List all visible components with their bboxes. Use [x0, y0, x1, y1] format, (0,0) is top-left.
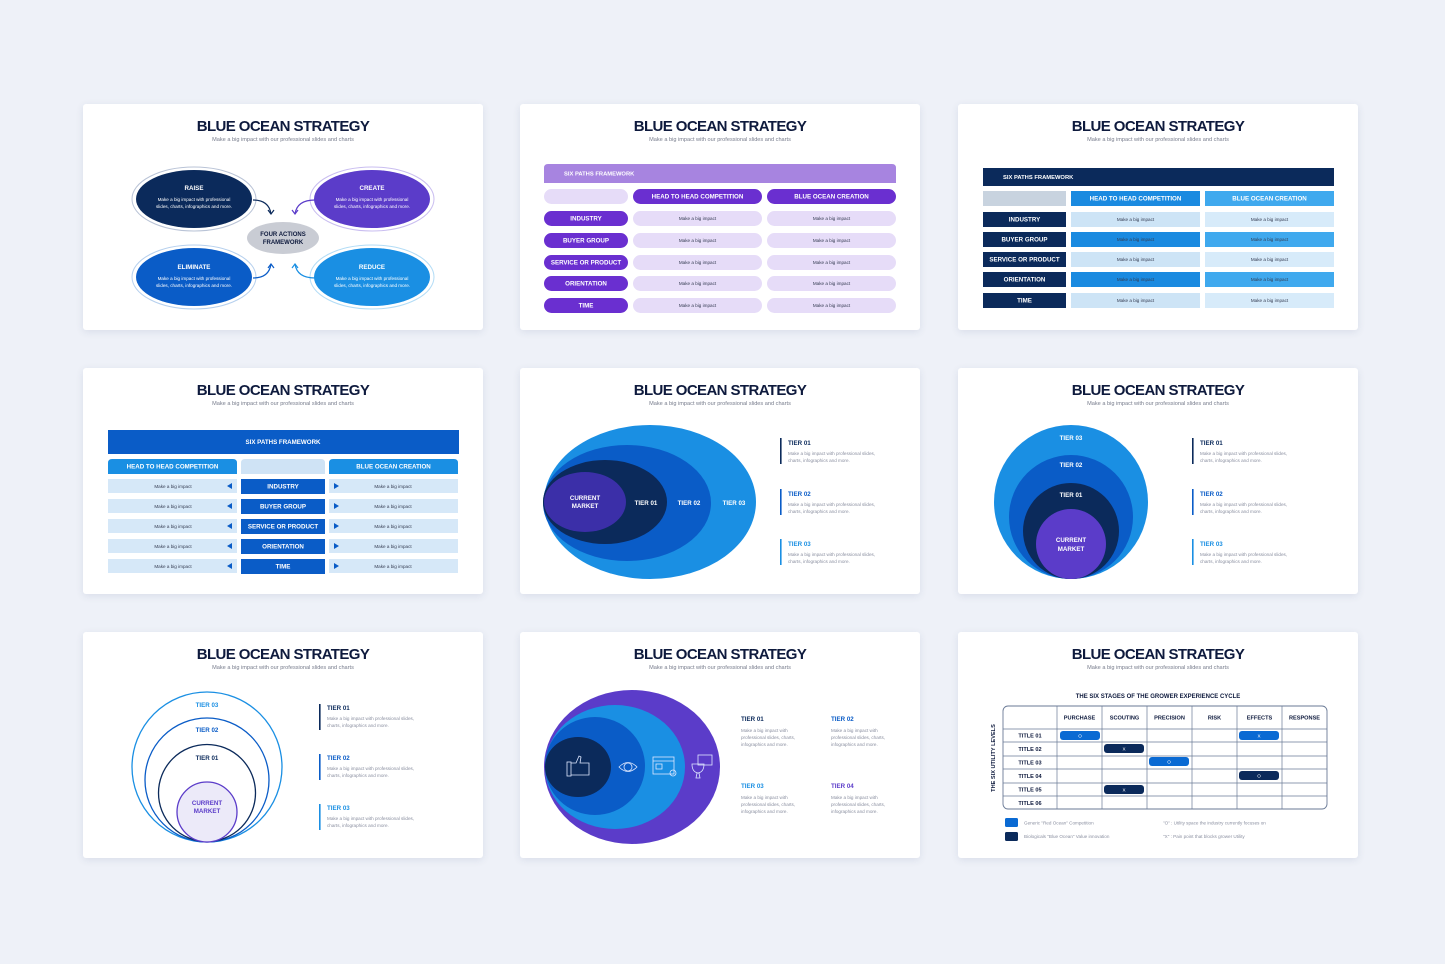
table: six paths purple: Make a big impact [679, 303, 717, 308]
ellipse: eliminate [132, 245, 256, 309]
text: tier 01: charts, infographics and more. [327, 723, 389, 728]
title: BLUE OCEAN STRATEGY [1072, 382, 1245, 399]
text: tier 02: Make a big impact with professional slides, [327, 766, 414, 771]
text: tier 04: professional slides, charts, [831, 802, 885, 807]
center: four actions framework: FRAMEWORK [263, 240, 304, 246]
table grid: SCOUTING [1110, 716, 1139, 722]
text: tier 04: TIER 04 [831, 783, 854, 790]
chart: nested ellipses: TIER 02 [678, 500, 701, 507]
text: tier 01: charts, infographics and more. [1200, 458, 1262, 463]
text: tier 02: TIER 02 [327, 755, 350, 762]
text: tier 02: charts, infographics and more. [327, 773, 389, 778]
legend: Biologicals "Blue Ocean" Value innovation [1024, 834, 1110, 839]
title [634, 382, 807, 407]
chart: outlined circles: TIER 01 [196, 755, 219, 762]
table: six paths navy: Make a big impact [1117, 237, 1155, 242]
text: tier 03 [319, 804, 414, 830]
slide 8: ellipses with icons [520, 632, 920, 858]
table: six paths blue: Make a big impact [154, 504, 192, 509]
text: tier 02: TIER 02 [788, 491, 811, 498]
icon: trophy [692, 755, 712, 778]
table: six paths blue [108, 430, 459, 574]
chart: outlined circles: CURRENT [192, 800, 222, 807]
text: tier 03: Make a big impact with professional slides, [788, 552, 875, 557]
table: six paths purple: TIME [579, 302, 593, 310]
table: six paths navy: ORIENTATION [1004, 276, 1046, 284]
chart: nested circles: TIER 01 [1060, 492, 1083, 499]
ellipse: reduce: Make a big impact with professional [336, 276, 408, 281]
table: six paths purple: Make a big impact [679, 238, 717, 243]
text: tier 02 [780, 489, 875, 515]
text: tier 01: Make a big impact with [741, 728, 788, 733]
text: tier 02: Make a big impact with [831, 728, 878, 733]
text: tier 01: TIER 01 [327, 705, 350, 712]
chart: nested circles: TIER 02 [1060, 462, 1083, 469]
table: six paths purple: Make a big impact [813, 216, 851, 221]
table: six paths navy: TIME [1017, 298, 1032, 304]
text: tier 03: infographics and more. [741, 809, 788, 814]
chart: nested ellipses: TIER 01 [635, 500, 658, 507]
table: six paths blue: SERVICE OR PRODUCT [248, 524, 318, 530]
text: tier 01: Make a big impact with professional slides, [327, 716, 414, 721]
table grid: EFFECTS [1247, 716, 1273, 722]
text: tier 03: Make a big impact with professional slides, [327, 816, 414, 821]
ellipse: reduce: slides, charts, infographics and more. [334, 283, 410, 288]
text: tier 02: charts, infographics and more. [1200, 509, 1262, 514]
text: tier 03: TIER 03 [1200, 541, 1223, 548]
table: six paths purple: ORIENTATION [565, 280, 607, 288]
title [197, 118, 370, 143]
table grid: O [1167, 760, 1171, 764]
table: six paths blue: TIME [276, 564, 290, 570]
text: tier 01 [741, 716, 795, 747]
chart: outlined circles: TIER 03 [196, 702, 219, 709]
text: tier 01: infographics and more. [741, 742, 788, 747]
table: six paths purple: Make a big impact [679, 281, 717, 286]
title [1072, 646, 1245, 671]
table: six paths blue: ORIENTATION [262, 544, 304, 550]
table grid: TITLE 01 [1018, 734, 1042, 740]
table: six paths blue: INDUSTRY [267, 484, 300, 490]
text: tier 01 [319, 704, 414, 730]
slide 5: nested ellipses tiers [520, 368, 920, 594]
arrows [253, 200, 315, 278]
ellipse: raise: Make a big impact with professional [158, 197, 230, 202]
title: Make a big impact with our professional slides and charts [1087, 401, 1229, 407]
table: six paths blue: Make a big impact [374, 484, 412, 489]
legend [1005, 818, 1266, 841]
slide 1: four actions framework [83, 104, 483, 330]
table: six paths blue: Make a big impact [154, 524, 192, 529]
table: six paths purple: Make a big impact [679, 216, 717, 221]
table: six paths blue: Make a big impact [374, 524, 412, 529]
text: tier 01: TIER 01 [788, 440, 811, 447]
text: tier 01: charts, infographics and more. [788, 458, 850, 463]
ellipse: reduce: REDUCE [359, 264, 385, 271]
legend: "X" : Pain point that blocks grower Utility [1163, 834, 1245, 839]
text: tier 02: Make a big impact with professional slides, [1200, 502, 1287, 507]
title: Make a big impact with our professional slides and charts [212, 401, 354, 407]
text: tier 02 [1192, 489, 1287, 515]
ellipse: reduce [310, 245, 434, 309]
table: six paths purple: BLUE OCEAN CREATION [794, 194, 869, 200]
title: BLUE OCEAN STRATEGY [634, 382, 807, 399]
table: six paths blue: SIX PATHS FRAMEWORK [245, 439, 321, 446]
title: Make a big impact with our professional slides and charts [1087, 137, 1229, 143]
ellipse: eliminate: Make a big impact with professional [158, 276, 230, 281]
table: six paths blue: Make a big impact [374, 564, 412, 569]
table: six paths navy: Make a big impact [1251, 277, 1289, 282]
table: six paths purple: SIX PATHS FRAMEWORK [564, 172, 635, 178]
table grid [1003, 706, 1327, 809]
table: six paths navy: SERVICE OR PRODUCT [989, 256, 1060, 264]
text: tier 03: charts, infographics and more. [327, 823, 389, 828]
text: tier 03: Make a big impact with [741, 795, 788, 800]
title: Make a big impact with our professional slides and charts [649, 137, 791, 143]
text: tier 01 [780, 438, 875, 464]
label: six utility levels: THE SIX UTILITY LEVELS [991, 724, 997, 792]
table: six paths blue: BUYER GROUP [260, 504, 306, 510]
center: four actions framework [247, 222, 319, 254]
ellipse: eliminate: slides, charts, infographics and more. [156, 283, 232, 288]
text: tier 02: TIER 02 [831, 716, 854, 723]
table: six paths navy: Make a big impact [1251, 237, 1289, 242]
table: six paths navy [983, 168, 1334, 308]
text: tier 03 [780, 539, 875, 565]
table grid: TITLE 02 [1018, 747, 1042, 753]
chart: nested circles [994, 425, 1148, 579]
title: BLUE OCEAN STRATEGY [197, 382, 370, 399]
table: six paths navy: Make a big impact [1117, 298, 1155, 303]
title: Make a big impact with our professional slides and charts [649, 665, 791, 671]
text: tier 02 [319, 754, 414, 780]
center: four actions framework: FOUR ACTIONS [260, 232, 306, 238]
title: BLUE OCEAN STRATEGY [634, 646, 807, 663]
text: tier 04: infographics and more. [831, 809, 878, 814]
text: tier 02: TIER 02 [1200, 491, 1223, 498]
table: six paths blue: Make a big impact [374, 544, 412, 549]
text: tier 02: charts, infographics and more. [788, 509, 850, 514]
text: tier 04: Make a big impact with [831, 795, 878, 800]
ellipse: raise: RAISE [185, 185, 203, 192]
title: BLUE OCEAN STRATEGY [197, 646, 370, 663]
title: BLUE OCEAN STRATEGY [1072, 646, 1245, 663]
slide 9: grower experience grid [958, 632, 1358, 858]
chart: nested circles: CURRENT [1056, 537, 1086, 544]
title: Make a big impact with our professional slides and charts [212, 137, 354, 143]
text: tier 03: TIER 03 [741, 783, 764, 790]
ellipse: raise: slides, charts, infographics and more. [156, 204, 232, 209]
table: six paths purple: Make a big impact [813, 281, 851, 286]
table: six paths navy: Make a big impact [1117, 257, 1155, 262]
slide 3: six paths navy table [958, 104, 1358, 330]
text: tier 01: TIER 01 [741, 716, 764, 723]
table: six paths purple: Make a big impact [813, 303, 851, 308]
chart: nested circles: TIER 03 [1060, 435, 1083, 442]
ellipse: create: slides, charts, infographics and more. [334, 204, 410, 209]
slide 2: six paths purple table [520, 104, 920, 330]
chart: outlined circles: MARKET [194, 808, 220, 815]
text: tier 01: Make a big impact with professional slides, [788, 451, 875, 456]
table: six paths blue: Make a big impact [154, 544, 192, 549]
legend: Generic "Red Ocean" Competition [1024, 820, 1094, 826]
table: six paths navy: Make a big impact [1251, 217, 1289, 222]
text: tier 03: professional slides, charts, [741, 802, 795, 807]
table grid: PURCHASE [1064, 716, 1095, 722]
chart: nested circles: MARKET [1058, 546, 1084, 553]
table grid: RESPONSE [1289, 716, 1320, 722]
chart: nested ellipses: MARKET [572, 503, 598, 510]
slide 4: six paths blue table with arrows [83, 368, 483, 594]
title: Make a big impact with our professional slides and charts [649, 401, 791, 407]
chart: nested ellipses [543, 425, 756, 579]
chart: nested ellipses: CURRENT [570, 495, 600, 502]
table: six paths navy: SIX PATHS FRAMEWORK [1003, 175, 1074, 181]
table: six paths purple: BUYER GROUP [563, 238, 609, 244]
title: BLUE OCEAN STRATEGY [197, 118, 370, 135]
text: tier 02: Make a big impact with professional slides, [788, 502, 875, 507]
table: six paths purple: Make a big impact [679, 260, 717, 265]
text: tier 02 [831, 716, 885, 747]
title [197, 646, 370, 671]
table: six paths navy: INDUSTRY [1009, 216, 1041, 224]
title: Make a big impact with our professional slides and charts [212, 665, 354, 671]
table grid: TITLE 03 [1018, 760, 1042, 766]
heading: six stages: THE SIX STAGES OF THE GROWER EXPERIENCE CYCLE [1076, 694, 1240, 700]
text: tier 01: TIER 01 [1200, 440, 1223, 447]
table grid: X [1122, 788, 1126, 792]
table: six paths navy: Make a big impact [1251, 298, 1289, 303]
text: tier 01: professional slides, charts, [741, 735, 795, 740]
table: six paths purple: HEAD TO HEAD COMPETITION [652, 194, 744, 200]
text: tier 04 [831, 783, 885, 814]
chart: outlined circles [132, 692, 282, 842]
text: tier 03 [741, 783, 795, 814]
text: tier 01: Make a big impact with professional slides, [1200, 451, 1287, 456]
text: tier 02: professional slides, charts, [831, 735, 885, 740]
title [634, 646, 807, 671]
table: six paths purple [544, 164, 896, 313]
table: six paths navy: Make a big impact [1251, 257, 1289, 262]
icon: thumbs up [567, 756, 589, 776]
table: six paths blue: HEAD TO HEAD COMPETITION [127, 464, 219, 470]
table: six paths navy: BUYER GROUP [1001, 236, 1048, 244]
table: six paths navy: HEAD TO HEAD COMPETITION [1090, 196, 1182, 202]
text: tier 03: TIER 03 [327, 805, 350, 812]
table: six paths purple: Make a big impact [813, 238, 851, 243]
table grid: O [1257, 774, 1261, 778]
table grid: TITLE 04 [1018, 774, 1043, 780]
chart: outlined circles: TIER 02 [196, 727, 219, 734]
title: Make a big impact with our professional slides and charts [1087, 665, 1229, 671]
legend: "O" : Utility space the industry currently focuses on [1163, 820, 1266, 826]
text: tier 03 [1192, 539, 1287, 565]
table: six paths blue: BLUE OCEAN CREATION [356, 464, 431, 470]
ellipse: raise [132, 167, 256, 231]
table grid: TITLE 05 [1018, 788, 1042, 794]
table grid: RISK [1208, 716, 1221, 722]
slide 7: outlined circles tiers [83, 632, 483, 858]
title [1072, 118, 1245, 143]
chart: ellipses with icons [544, 690, 720, 844]
title [634, 118, 807, 143]
table: six paths purple: Make a big impact [813, 260, 851, 265]
table: six paths purple: SERVICE OR PRODUCT [551, 260, 621, 266]
icon: browser [653, 757, 676, 776]
text: tier 03: charts, infographics and more. [788, 559, 850, 564]
title: BLUE OCEAN STRATEGY [1072, 118, 1245, 135]
table: six paths navy: BLUE OCEAN CREATION [1232, 196, 1307, 202]
table grid: X [1257, 734, 1261, 738]
ellipse: create: Make a big impact with professional [336, 197, 408, 202]
table: six paths navy: Make a big impact [1117, 217, 1155, 222]
title: BLUE OCEAN STRATEGY [634, 118, 807, 135]
text: tier 02: infographics and more. [831, 742, 878, 747]
icon: eye [619, 762, 637, 772]
ellipse: create [310, 167, 434, 231]
text: tier 03: charts, infographics and more. [1200, 559, 1262, 564]
table: six paths blue: Make a big impact [154, 484, 192, 489]
table: six paths navy: Make a big impact [1117, 277, 1155, 282]
table grid: X [1122, 746, 1126, 752]
title [1072, 382, 1245, 407]
title [197, 382, 370, 407]
text: tier 01 [1192, 438, 1287, 464]
table: six paths blue: Make a big impact [374, 504, 412, 509]
table grid: TITLE 06 [1018, 801, 1042, 807]
chart: nested ellipses: TIER 03 [723, 500, 746, 507]
table: six paths blue: Make a big impact [154, 564, 192, 569]
table: six paths purple: INDUSTRY [570, 216, 603, 222]
text: tier 03: Make a big impact with professional slides, [1200, 552, 1287, 557]
table grid: PRECISION [1154, 716, 1185, 722]
slide 6: nested circles tiers [958, 368, 1358, 594]
ellipse: eliminate: ELIMINATE [178, 264, 210, 271]
text: tier 03: TIER 03 [788, 541, 811, 548]
ellipse: create: CREATE [360, 185, 384, 192]
table grid: O [1078, 734, 1082, 738]
